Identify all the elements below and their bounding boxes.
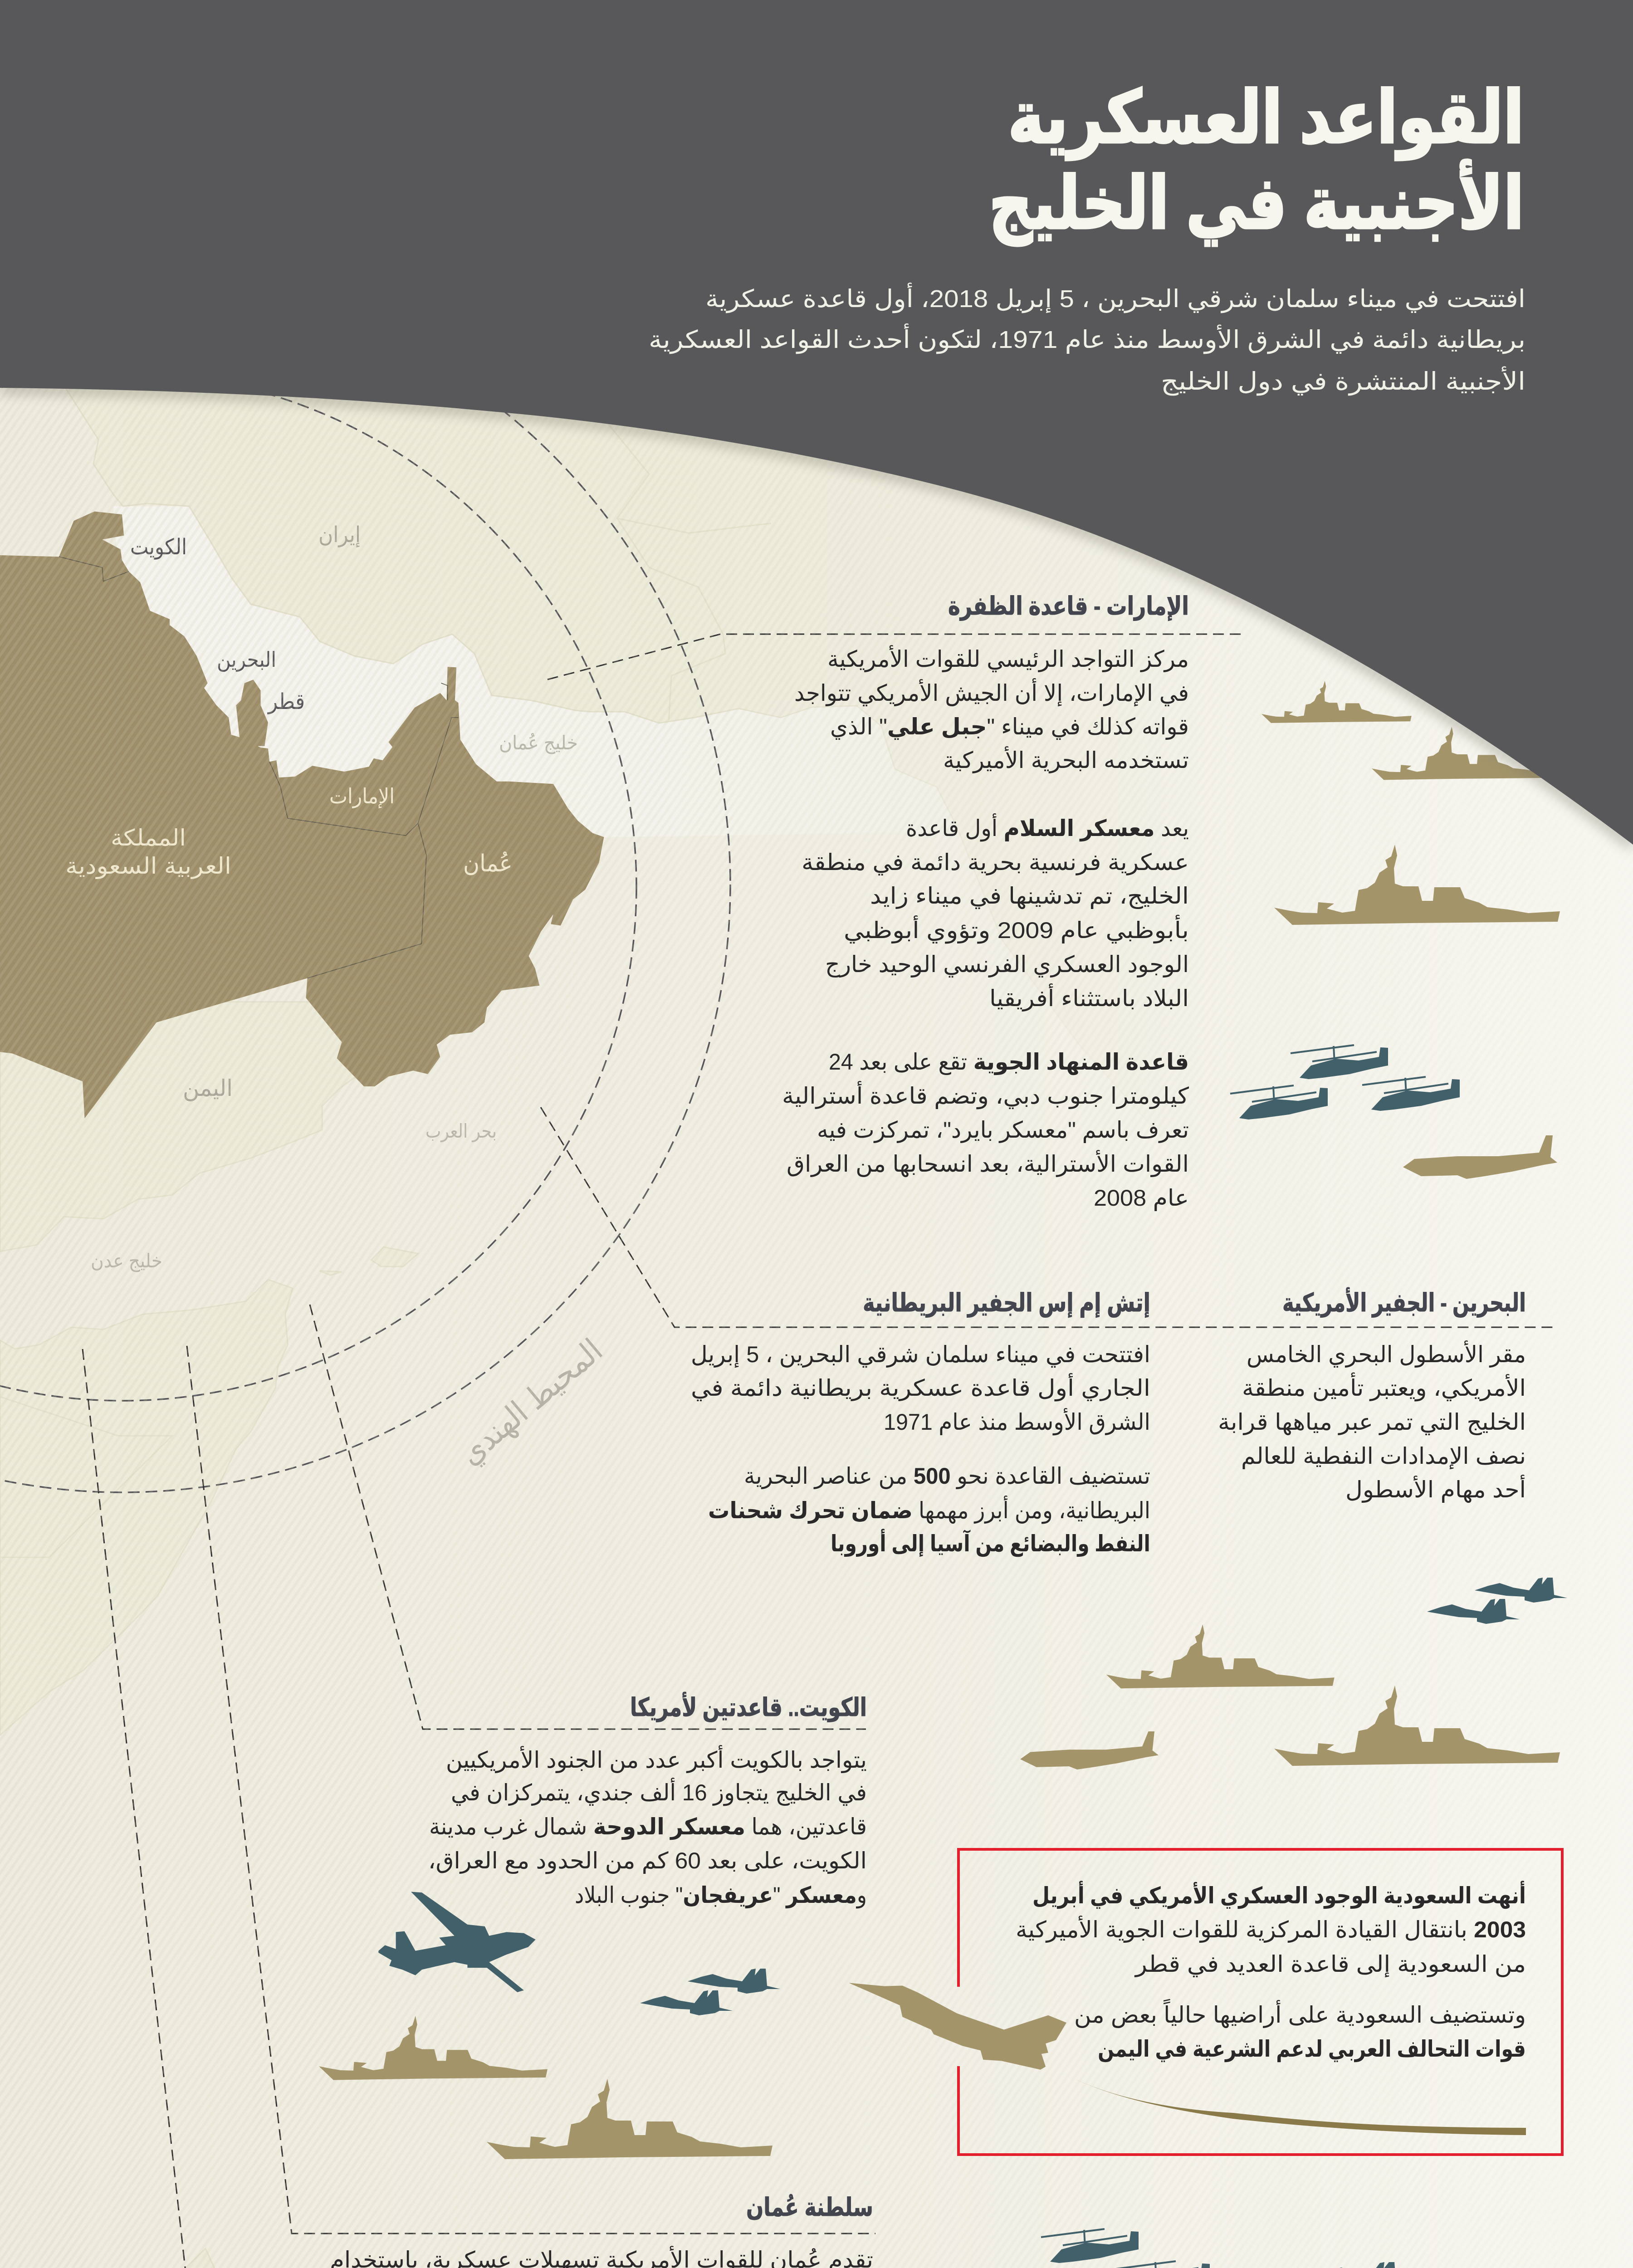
- label: Oman: عُمان: [463, 850, 513, 877]
- icon: ship: [1274, 1686, 1560, 1766]
- icon: helicopter: [1362, 1077, 1460, 1111]
- label: Saudi Arabia line 2: العربية السعودية: [65, 853, 231, 879]
- faint borders: [0, 420, 771, 1557]
- label: Arabian Sea: بحر العرب: [425, 1120, 497, 1142]
- icon: tanker plane: [1020, 1731, 1159, 1769]
- text block: opening: الشرق الأوسط منذ عام 1971: [884, 1408, 1150, 1436]
- text block: Bahrain: [1218, 1340, 1526, 1503]
- ring: outer: [0, 277, 730, 1492]
- panel: Oman: [330, 2193, 873, 2268]
- text block: Al Dhafra: تستخدمه البحرية الأميركية: [943, 746, 1189, 773]
- text block: Al Dhafra: قواته كذلك في ميناء "جبل علي" الذي: [830, 714, 1189, 740]
- intro line 3: الأجنبية المنتشرة في دول الخليج: [1161, 366, 1525, 396]
- text block: Bahrain: الخليج التي تمر عبر مياهها قرابة: [1218, 1409, 1526, 1436]
- map labels: [65, 523, 610, 1472]
- text block: Peace Camp: عسكرية فرنسية بحرية دائمة في منطقة: [802, 850, 1189, 875]
- icon: helicopter: [1291, 1045, 1388, 1079]
- vehicles: Kuwait group: [319, 1892, 780, 2159]
- water: Persian Gulf: [113, 506, 590, 785]
- label: Gulf of Aden: خليج عدن: [91, 1250, 162, 1272]
- intro line 2: بريطانية دائمة في الشرق الأوسط منذ عام 1971، لتكون أحدث القواعد العسكرية: [649, 323, 1525, 354]
- text block: opening: [691, 1342, 1150, 1436]
- heading: Kuwait: الكويت.. قاعدتين لأمريكا: [630, 1691, 867, 1722]
- header band: [0, 0, 1633, 845]
- text block: withdrawal: 2003 بانتقال القيادة المركزية للقوات الجوية الأميركية: [1016, 1916, 1526, 1943]
- text block: Al Minhad: تعرف باسم "معسكر بايرد"، تمركزت فيه: [817, 1117, 1189, 1143]
- title line 2: الأجنبية في الخليج: [989, 159, 1524, 246]
- vehicles: Emirates group: [1261, 681, 1561, 1179]
- text block: withdrawal: أنهت السعودية الوجود العسكري الأمريكي في أبريل: [1032, 1881, 1526, 1909]
- label: Indian Ocean: المحيط الهندي: [453, 1332, 610, 1472]
- icon: ship: [1106, 1624, 1335, 1688]
- map: Gulf states: [0, 512, 604, 1118]
- stripe texture: [0, 388, 1468, 2268]
- text block: opening: افتتحت في ميناء سلمان شرقي البحرين ، 5 إبريل: [691, 1342, 1150, 1368]
- icon: fighter: [1427, 1599, 1520, 1624]
- label: Saudi Arabia line 1: المملكة: [111, 825, 186, 850]
- panel: Bahrain: [1218, 1287, 1526, 1503]
- text block: Peace Camp: بأبوظبي عام 2009 وتؤوي أبوظبي: [844, 914, 1189, 944]
- land: Yemen coast: [0, 1002, 393, 1251]
- icon: fighter: [1475, 1578, 1567, 1603]
- panel: HMS Juffair: [691, 1288, 1150, 1557]
- icon: helicopter: [1112, 2261, 1210, 2268]
- icon: ship: [1274, 845, 1560, 925]
- panel: Emirates: [782, 591, 1189, 1211]
- icon: ship: [487, 2079, 772, 2159]
- icon: tanker plane: [1403, 1135, 1557, 1179]
- text block: Al Minhad: قاعدة المنهاد الجوية تقع على بعد 24: [829, 1049, 1189, 1075]
- text block: coalition: قوات التحالف العربي لدعم الشرعية في اليمن: [1098, 2036, 1526, 2063]
- text block: Bahrain: نصف الإمدادات النفطية للعالم: [1241, 1443, 1526, 1469]
- label: Iran: إيران: [318, 523, 361, 547]
- leader: Emirates: [548, 634, 1244, 679]
- land: Socotra: [320, 1247, 418, 1275]
- icon: fighter: [640, 1990, 733, 2015]
- text block: withdrawal: من السعودية إلى قاعدة العديد في قطر: [1134, 1951, 1526, 1978]
- icon: ship: [319, 2016, 548, 2080]
- text block: Kuwait: ومعسكر "عريفجان" جنوب البلاد: [575, 1882, 867, 1909]
- leader: Bahrain: [541, 1107, 1555, 1327]
- intro line 1: افتتحت في ميناء سلمان شرقي البحرين ، 5 إبريل 2018، أول قاعدة عسكرية: [705, 283, 1525, 313]
- icon: fighter: [688, 1969, 780, 1994]
- text block: Al Minhad: كيلومترا جنوب دبي، وتضم قاعدة أسترالية: [782, 1081, 1189, 1110]
- text block: Peace Camp: الخليج، تم تدشينها في ميناء زايد: [870, 883, 1189, 909]
- text block: Bahrain: أحد مهام الأسطول: [1345, 1475, 1526, 1503]
- text block: Al Dhafra: مركز التواجد الرئيسي للقوات الأمريكية: [827, 645, 1189, 672]
- land: Madagascar: [0, 2248, 240, 2268]
- vehicles: Bahrain group: [1020, 1624, 1560, 1769]
- heading: HMS Juffair: إتش إم إس الجفير البريطانية: [863, 1288, 1150, 1318]
- text block: Bahrain: مقر الأسطول البحري الخامس: [1247, 1340, 1526, 1368]
- water: Gulf of Oman band: [454, 699, 1043, 837]
- label: Bahrain: البحرين: [217, 648, 276, 672]
- text block: Peace Camp: البلاد باستثناء أفريقيا: [989, 983, 1189, 1012]
- intro text: [649, 283, 1525, 396]
- icon: helicopter: [1041, 2229, 1139, 2263]
- text block: Kuwait: قاعدتين، هما معسكر الدوحة شمال غرب مدينة: [429, 1814, 867, 1840]
- text block: Peace Camp: [802, 813, 1189, 1012]
- leader lines: [83, 634, 1555, 2268]
- heading: Oman: سلطنة عُمان: [746, 2193, 873, 2221]
- title line 1: القواعد العسكرية: [1008, 77, 1524, 160]
- callout border: [958, 1849, 1562, 2155]
- text block: Peace Camp: الوجود العسكري الفرنسي الوحيد خارج: [825, 952, 1189, 978]
- land: Saudi Arabia, Kuwait, UAE, Oman: [0, 512, 604, 1118]
- text block: Bahrain: الأمريكي، ويعتبر تأمين منطقة: [1242, 1372, 1526, 1402]
- land: Horn of Africa: [0, 1280, 293, 1735]
- leader: Kuwait: [310, 1305, 866, 1729]
- fighters: Bahrain group: [1427, 1578, 1567, 1624]
- text block: hosting: [708, 1463, 1150, 1557]
- text block: hosting: النفط والبضائع من آسيا إلى أوروبا: [831, 1529, 1150, 1557]
- icon: ship: [1372, 727, 1561, 780]
- text block: Kuwait: يتواجد بالكويت أكبر عدد من الجنود الأمريكيين: [446, 1745, 867, 1773]
- text block: hosting: تستضيف القاعدة نحو 500 من عناصر البحرية: [744, 1463, 1150, 1489]
- range rings: [0, 277, 730, 1492]
- icon: transport plane: [378, 1892, 536, 1992]
- label: Yemen: اليمن: [183, 1075, 233, 1101]
- text block: opening: الجاري أول قاعدة عسكرية بريطانية دائمة في: [691, 1373, 1150, 1402]
- map: faint land and sea: [0, 386, 1225, 2268]
- panel: Kuwait: [428, 1691, 867, 1909]
- icon: jet trail: [1056, 2069, 1526, 2135]
- text block: withdrawal: [1016, 1881, 1526, 1978]
- land: Iran, Pakistan and India: [64, 386, 1225, 1218]
- text block: Al Dhafra: في الإمارات، إلا أن الجيش الأمريكي تتواجد: [794, 678, 1189, 707]
- text block: Al Minhad: القوات الأسترالية، بعد انسحابها من العراق: [787, 1150, 1189, 1178]
- vehicles: Oman group: [980, 2229, 1409, 2268]
- text block: Peace Camp: يعد معسكر السلام أول قاعدة: [906, 813, 1189, 842]
- icon: fighter: [1316, 2262, 1409, 2268]
- title: [989, 77, 1524, 246]
- label: Gulf of Oman: خليج عُمان: [499, 732, 578, 754]
- text block: coalition: [1074, 1999, 1526, 2063]
- header shadow: [0, 388, 1633, 845]
- icon: jet: [849, 1983, 1066, 2070]
- heading: Emirates: الإمارات - قاعدة الظفرة: [948, 591, 1189, 621]
- text block: Al Minhad: عام 2008: [1094, 1185, 1189, 1211]
- icon: ship: [1261, 681, 1412, 723]
- text block: coalition: وتستضيف السعودية على أراضيها حالياً بعض من: [1074, 1999, 1526, 2028]
- leader: Oman: [187, 1346, 875, 2234]
- text block: Kuwait: الكويت، على بعد 60 كم من الحدود مع العراق،: [428, 1848, 867, 1874]
- leader: Sayliya: [83, 1349, 1458, 2268]
- ring: inner: [0, 373, 636, 1401]
- text block: hosting: البريطانية، ومن أبرز مهمها ضمان تحرك شحنات: [708, 1496, 1150, 1524]
- callout: Saudi Arabia: [849, 1849, 1562, 2155]
- label: Qatar: قطر: [267, 690, 305, 714]
- land: Qatar: [236, 679, 268, 746]
- heading: Bahrain: البحرين - الجفير الأمريكية: [1282, 1287, 1526, 1318]
- text block: Al Dhafra: [794, 645, 1189, 773]
- text block: Kuwait: [428, 1745, 867, 1909]
- country borders: [59, 557, 458, 978]
- label: Kuwait: الكويت: [130, 535, 187, 560]
- text block: Al Minhad: [782, 1049, 1189, 1211]
- icon: helicopter: [1230, 1085, 1328, 1119]
- helicopters: Emirates group: [1230, 1045, 1460, 1119]
- text block: Kuwait: في الخليج يتجاوز 16 ألف جندي، يتمركزان في: [451, 1778, 867, 1806]
- label: UAE: الإمارات: [329, 784, 395, 808]
